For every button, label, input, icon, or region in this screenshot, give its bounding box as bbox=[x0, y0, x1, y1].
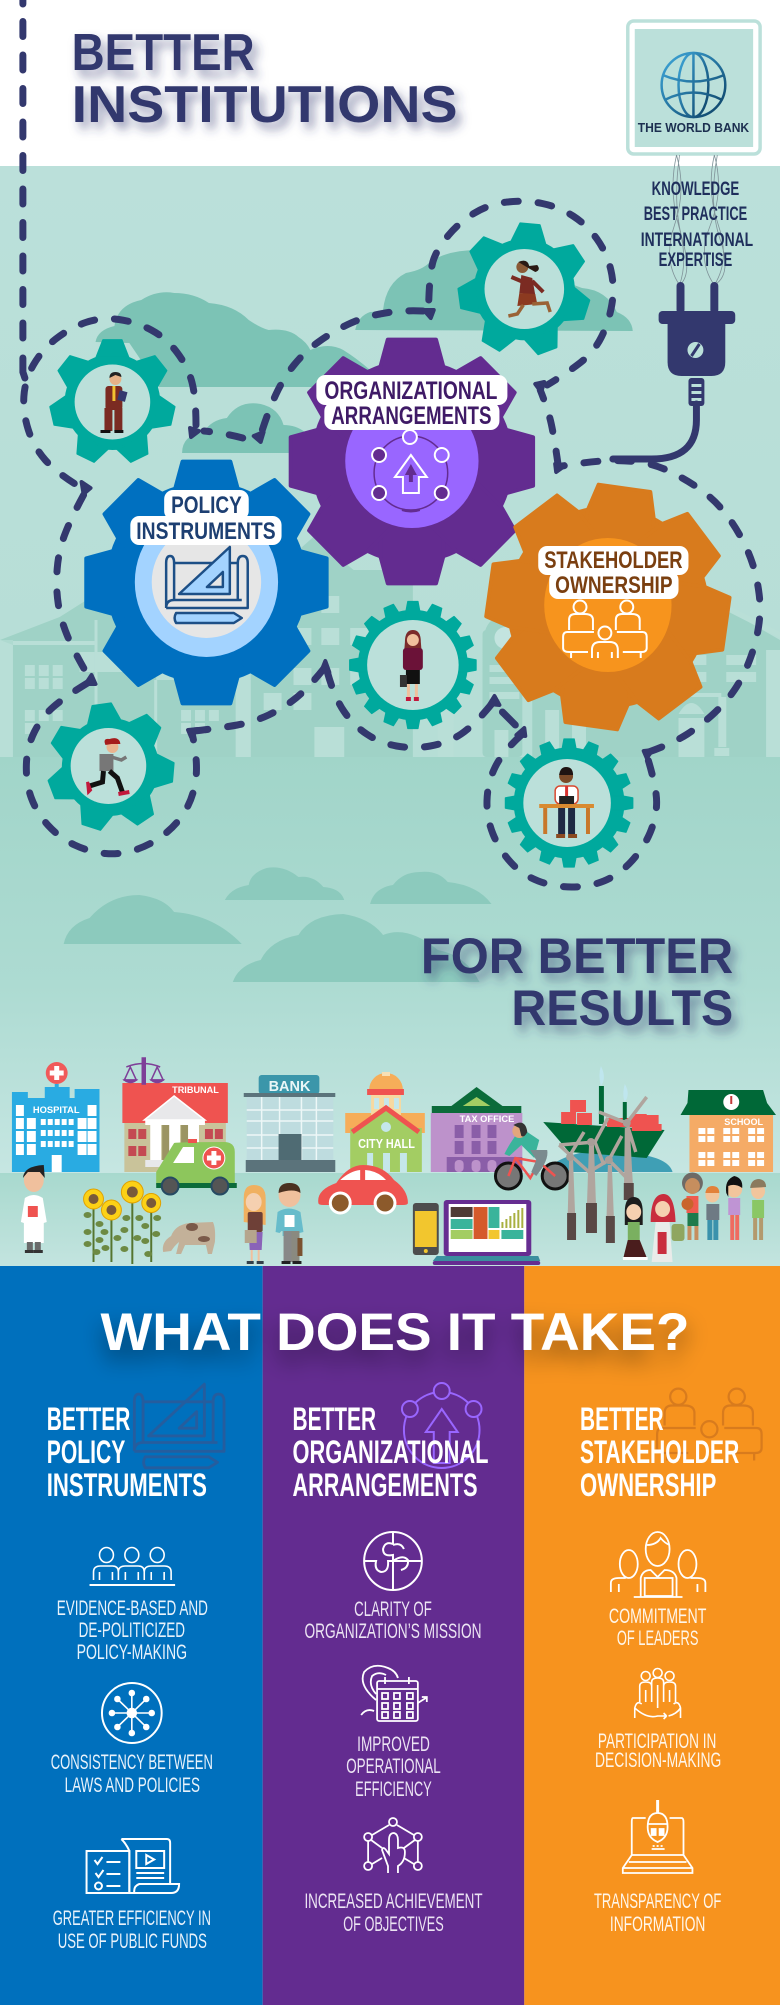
icon: three people at table bbox=[90, 1548, 175, 1585]
person: doctor bbox=[21, 1165, 47, 1253]
icon: scales of justice bbox=[124, 1058, 163, 1084]
text: improved operational efficiency: IMPROVED bbox=[357, 1733, 430, 1756]
town: ambulance bbox=[156, 1139, 237, 1194]
dashed process path bbox=[23, 22, 760, 887]
cloud: lower wide bbox=[233, 914, 480, 982]
town: cargo ship bbox=[543, 1066, 673, 1172]
icon: consistency hub bbox=[102, 1683, 162, 1743]
gear: running woman bottom left bbox=[38, 696, 183, 839]
heading: for better results: RESULTS bbox=[511, 980, 733, 1036]
ghost icon: stakeholders bbox=[657, 1389, 762, 1460]
person: woman with bag bbox=[244, 1185, 266, 1264]
sunflowers bbox=[84, 1181, 161, 1264]
text: transparency of information: INFORMATION bbox=[610, 1913, 705, 1936]
child: boy in green bbox=[750, 1179, 766, 1240]
town: school: SCHOOL bbox=[724, 1117, 764, 1127]
heading: better policy instruments: BETTER bbox=[47, 1401, 130, 1437]
text: greater efficiency: GREATER EFFICIENCY IN bbox=[53, 1907, 211, 1930]
gear: woman with briefcase bbox=[350, 602, 476, 728]
gear label: organizational arrangements: ORGANIZATIONAL bbox=[324, 377, 497, 405]
cloud: upper right bbox=[355, 250, 633, 331]
laptop with dashboard bbox=[433, 1200, 540, 1265]
gear label: organizational arrangements bbox=[316, 375, 507, 430]
icon: organization network bbox=[372, 430, 449, 512]
knowledge labels: KNOWLEDGE bbox=[652, 179, 739, 200]
town: hospital: HOSPITAL bbox=[33, 1105, 80, 1115]
person: businesswoman bbox=[400, 630, 423, 701]
title: better institutions: BETTER bbox=[72, 23, 255, 81]
panel: organization column bbox=[263, 1266, 524, 2005]
icon: participation group bbox=[635, 1668, 681, 1719]
town: city hall bbox=[345, 1072, 425, 1172]
person: man bbox=[100, 372, 128, 433]
gear label: organizational arrangements: ARRANGEMENTS bbox=[331, 402, 491, 430]
heading: better organizational arrangements: BETTER bbox=[293, 1401, 376, 1437]
text: increased achievement: OF OBJECTIVES bbox=[343, 1913, 444, 1936]
heading: for better results bbox=[421, 928, 733, 1036]
child: kid with basketball bbox=[682, 1172, 703, 1240]
town: bank: BANK bbox=[269, 1078, 311, 1095]
cow bbox=[163, 1222, 215, 1254]
text: consistency between laws and policies bbox=[51, 1751, 213, 1797]
text: consistency between laws and policies: LAWS AND POLICIES bbox=[65, 1774, 200, 1797]
panel: stakeholder column bbox=[524, 1266, 780, 2005]
cloud: large upper left bbox=[96, 292, 383, 387]
knowledge labels: EXPERTISE bbox=[659, 250, 732, 271]
icon: calendar and target bbox=[361, 1666, 427, 1721]
icon: power plug bbox=[613, 282, 735, 459]
text: improved operational efficiency bbox=[346, 1733, 441, 1801]
title: better institutions bbox=[72, 23, 458, 133]
child: girl in red hood bbox=[651, 1194, 684, 1262]
text: increased achievement: INCREASED ACHIEVEMENT bbox=[304, 1890, 483, 1913]
world bank logo box bbox=[628, 21, 760, 154]
text: evidence-based policy-making: EVIDENCE-BASED AND bbox=[57, 1597, 208, 1620]
ground background bbox=[0, 757, 780, 1173]
town: school bbox=[681, 1090, 776, 1172]
child: redhead with backpack bbox=[705, 1186, 719, 1240]
fraying wires into plug bbox=[670, 155, 725, 285]
top white band bbox=[0, 0, 780, 166]
text: improved operational efficiency: EFFICIENCY bbox=[355, 1778, 432, 1801]
heading: for better results: FOR BETTER bbox=[421, 928, 733, 984]
cloud: far lower left bbox=[64, 895, 242, 944]
gear: policy instruments bbox=[86, 462, 327, 704]
text: greater efficiency: USE OF PUBLIC FUNDS bbox=[58, 1930, 207, 1953]
town: cyclist bbox=[495, 1123, 568, 1189]
icon: stakeholders at table bbox=[563, 600, 647, 658]
gear label: stakeholder ownership bbox=[538, 546, 688, 599]
title: better institutions: INSTITUTIONS bbox=[72, 75, 458, 133]
gear label: policy instruments bbox=[130, 490, 282, 545]
person: running woman bbox=[508, 261, 550, 316]
heading: better organizational arrangements bbox=[293, 1401, 488, 1503]
heading: better stakeholder ownership bbox=[580, 1401, 739, 1503]
icon: hand and network bbox=[364, 1818, 422, 1873]
text: clarity of mission: CLARITY OF bbox=[354, 1598, 432, 1621]
cloud: lower centre bbox=[370, 872, 491, 904]
background city silhouettes bbox=[0, 537, 780, 757]
town: bank bbox=[244, 1075, 335, 1172]
town: hospital bbox=[12, 1062, 99, 1172]
town: wind turbines bbox=[559, 1097, 647, 1243]
heading: better policy instruments: POLICY bbox=[47, 1434, 125, 1470]
icon: leaders bbox=[611, 1532, 705, 1597]
ghost icon: blueprint bbox=[134, 1384, 224, 1468]
cloud: small centre bbox=[182, 403, 318, 453]
icon: blueprint and ruler bbox=[166, 547, 248, 623]
cloud: lower left bbox=[225, 867, 344, 900]
gear: running woman top right bbox=[452, 218, 597, 362]
text: clarity of mission bbox=[304, 1598, 482, 1643]
text: clarity of mission: ORGANIZATION’S MISSION bbox=[304, 1620, 482, 1643]
gear label: stakeholder ownership: STAKEHOLDER bbox=[544, 547, 683, 574]
text: increased achievement bbox=[304, 1890, 483, 1936]
mint sky background bbox=[0, 166, 780, 758]
icon: laptop and lamp bbox=[623, 1800, 692, 1873]
town: tax office: TAX OFFICE bbox=[460, 1114, 514, 1124]
child: girl in floral skirt bbox=[623, 1197, 648, 1260]
people: children group bbox=[623, 1172, 766, 1262]
town: tax office bbox=[431, 1087, 522, 1172]
knowledge labels bbox=[641, 179, 753, 271]
phone bbox=[413, 1203, 439, 1255]
heading: better policy instruments bbox=[47, 1401, 207, 1503]
text: evidence-based policy-making bbox=[57, 1597, 208, 1664]
icon: puzzle circle bbox=[364, 1532, 422, 1590]
text: improved operational efficiency: OPERATIONAL bbox=[346, 1755, 441, 1778]
gear: man at desk bbox=[505, 739, 633, 867]
text: participation in decision-making bbox=[595, 1730, 721, 1772]
town: city hall: CITY HALL bbox=[358, 1136, 415, 1151]
text: evidence-based policy-making: POLICY-MAKING bbox=[77, 1641, 187, 1664]
heading: better stakeholder ownership: OWNERSHIP bbox=[580, 1467, 716, 1503]
person: running woman grey jacket bbox=[88, 738, 129, 794]
clouds behind gears bbox=[96, 250, 633, 453]
path arrowheads bbox=[82, 310, 653, 758]
child: girl in lilac bbox=[726, 1176, 742, 1240]
text: consistency between laws and policies: CONSISTENCY BETWEEN bbox=[51, 1751, 213, 1774]
world bank logo box: THE WORLD BANK bbox=[638, 121, 749, 135]
text: evidence-based policy-making: DE-POLITICIZED bbox=[79, 1619, 185, 1642]
panel: policy column bbox=[0, 1266, 263, 2005]
text: greater efficiency bbox=[53, 1907, 211, 1953]
gear label: policy instruments: INSTRUMENTS bbox=[136, 518, 276, 545]
heading: better policy instruments: INSTRUMENTS bbox=[47, 1467, 207, 1503]
text: commitment of leaders: COMMITMENT bbox=[609, 1605, 707, 1628]
heading: better stakeholder ownership: BETTER bbox=[580, 1401, 664, 1437]
town: tribunal bbox=[122, 1058, 228, 1172]
heading: what does it take: WHAT DOES IT TAKE? bbox=[100, 1303, 689, 1362]
icon: documents and checklist bbox=[87, 1839, 179, 1893]
text: participation in decision-making: DECISION-MAKING bbox=[595, 1749, 721, 1772]
heading: better organizational arrangements: ORGANIZATIONAL bbox=[293, 1434, 488, 1470]
text: commitment of leaders bbox=[609, 1605, 707, 1650]
icon: globe bbox=[662, 53, 725, 117]
town: red car bbox=[318, 1165, 408, 1213]
lower street ground bbox=[0, 1173, 780, 1266]
person: man at desk bbox=[539, 767, 594, 838]
heading: better organizational arrangements: ARRANGEMENTS bbox=[293, 1467, 478, 1503]
town: tribunal: TRIBUNAL bbox=[172, 1085, 219, 1095]
gear: stakeholder ownership bbox=[473, 471, 743, 743]
gear label: stakeholder ownership: OWNERSHIP bbox=[555, 572, 673, 599]
ghost icon: organization network bbox=[402, 1383, 482, 1468]
person: man with briefcase bbox=[276, 1183, 303, 1264]
gear: man with tablet bbox=[49, 340, 176, 465]
text: transparency of information bbox=[594, 1890, 721, 1936]
gear: organizational arrangements bbox=[291, 340, 533, 584]
text: commitment of leaders: OF LEADERS bbox=[617, 1627, 698, 1650]
gear label: policy instruments: POLICY bbox=[171, 492, 242, 519]
top dash and connector bbox=[23, 0, 25, 378]
text: participation in decision-making: PARTICIPATION IN bbox=[598, 1730, 716, 1753]
